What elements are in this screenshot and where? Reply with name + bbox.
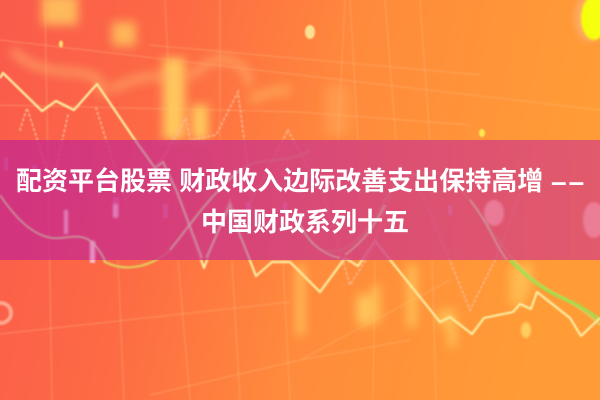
smooth moving average line (0, 150, 310, 267)
title line 1: 配资平台股票 财政收入边际改善支出保持高增 (16, 166, 543, 196)
band highlights (64, 200, 600, 261)
title (16, 166, 586, 237)
blurred yellow candlesticks (12, 0, 532, 347)
lines over band (0, 140, 507, 260)
title line 2: 中国财政系列十五 (201, 207, 409, 237)
ring marker (0, 303, 11, 323)
dotted trend line (20, 92, 520, 310)
candlesticks (4, 157, 452, 263)
main price line (0, 73, 600, 336)
translucent title band (0, 140, 600, 260)
title: –– (551, 166, 586, 197)
